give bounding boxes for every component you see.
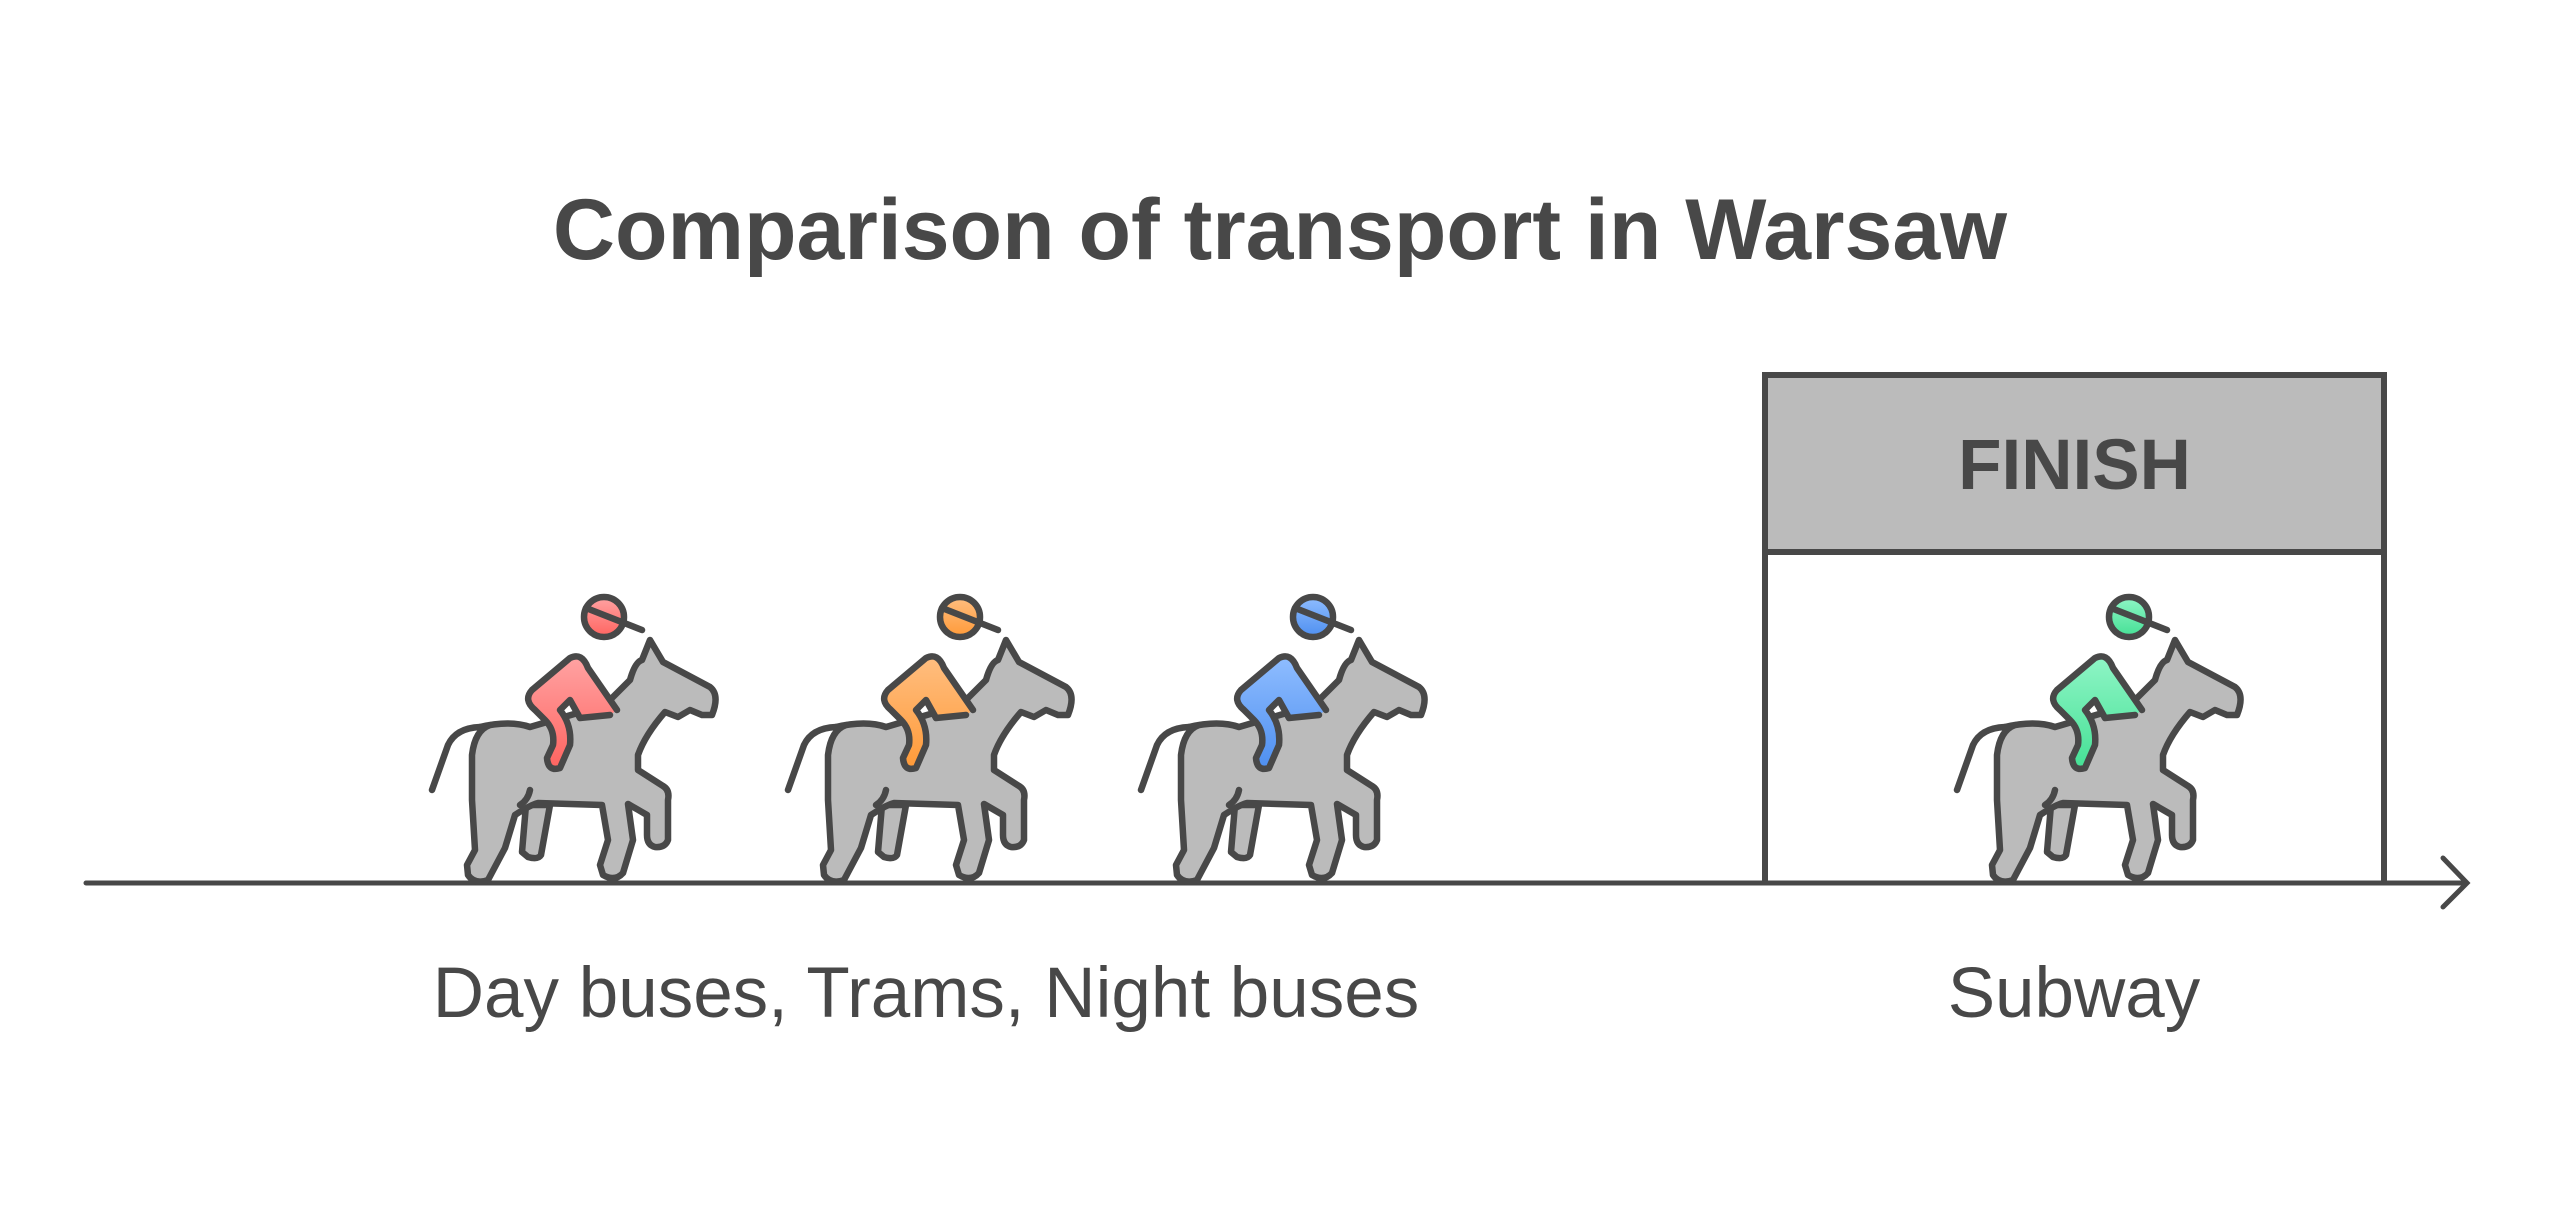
- horse rider: trams (orange): [788, 597, 1072, 882]
- finish box: [1765, 375, 2384, 883]
- horse rider: night buses (blue): [1141, 597, 1425, 882]
- axis arrow: [86, 858, 2467, 907]
- label: surface transport: Day buses, Trams, Night buses: [433, 954, 1419, 1033]
- horse rider: subway (green): [1957, 597, 2241, 882]
- title: Comparison of transport in Warsaw: [553, 182, 2007, 278]
- horse rider: day buses (red): [432, 597, 716, 882]
- finish label: FINISH: [1958, 426, 2191, 505]
- label: subway: Subway: [1948, 954, 2200, 1033]
